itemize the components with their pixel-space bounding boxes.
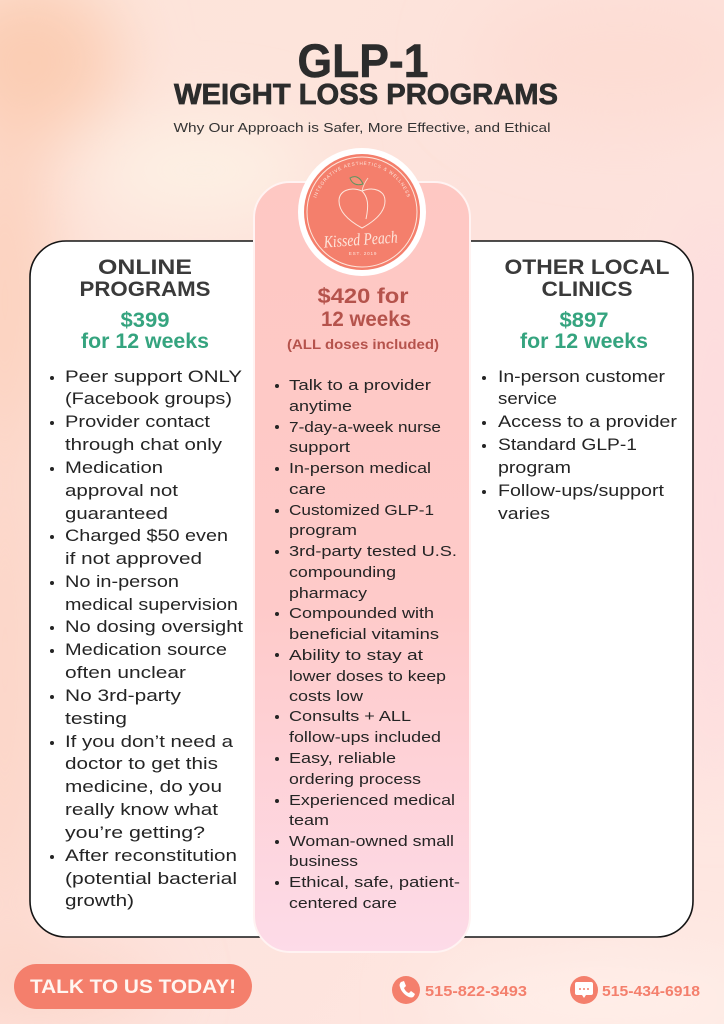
logo: kissed peach: INTEGRATIVE AESTHETICS & WELLNESS [313, 162, 410, 198]
logo: kissed peach: Kissed Peach [322, 227, 398, 252]
list: other local clinics: In-person customer [498, 368, 666, 386]
list: online programs: medicine, do you [65, 778, 222, 796]
icon: chat bubble [570, 976, 598, 1004]
price: kissed peach: (ALL doses included) [287, 336, 439, 352]
center column background [254, 182, 470, 952]
list: online programs: Peer support ONLY [65, 368, 242, 386]
list: kissed peach: follow-ups included [289, 729, 441, 746]
list: kissed peach: lower doses to keep [289, 668, 446, 685]
list: online programs: approval not [65, 482, 179, 500]
list: kissed peach: Ethical, safe, patient- [289, 874, 460, 891]
panel: kissed peach program [253, 148, 471, 953]
list: online programs: After reconstitution [65, 847, 237, 865]
list: kissed peach: support [289, 439, 351, 456]
list: kissed peach: team [289, 812, 329, 829]
list: online programs: Charged $50 even [65, 527, 228, 545]
list: kissed peach: Woman-owned small [289, 833, 454, 850]
list: other local clinics: Standard GLP-1 [498, 436, 637, 454]
price: other local clinics: $897 [560, 309, 608, 332]
list: kissed peach: anytime [289, 398, 352, 415]
list: other local clinics [482, 368, 678, 523]
list: other local clinics: program [498, 459, 571, 477]
list: online programs: If you don’t need a [65, 733, 234, 751]
list: other local clinics: Follow-ups/support [498, 482, 664, 500]
list: online programs: doctor to get this [65, 755, 218, 773]
heading: online programs [80, 256, 210, 301]
contact: phone: 515-822-3493 [425, 984, 527, 1000]
list: kissed peach: 3rd-party tested U.S. [289, 543, 457, 560]
list: kissed peach: 7-day-a-week nurse [289, 419, 441, 436]
list: online programs: (potential bacterial [65, 870, 237, 888]
list: online programs: Medication [65, 459, 163, 477]
panel: comparison card background [30, 241, 693, 937]
price: online programs [81, 309, 209, 353]
heading: other local clinics [504, 256, 670, 301]
price: other local clinics [520, 309, 648, 353]
list: online programs: growth) [65, 892, 134, 910]
list: online programs: (Facebook groups) [65, 390, 232, 408]
price: online programs: for 12 weeks [81, 330, 209, 353]
list: online programs: medical supervision [65, 596, 238, 614]
list: online programs: really know what [65, 801, 219, 819]
contact: text message: 515-434-6918 [602, 984, 700, 1000]
heading: other local clinics: OTHER LOCAL [504, 256, 670, 279]
heading: online programs: PROGRAMS [80, 278, 210, 301]
list: kissed peach: Ability to stay at [289, 647, 424, 664]
list: kissed peach: costs low [289, 688, 363, 705]
panel: online programs [50, 256, 243, 910]
icon: peach [339, 178, 385, 228]
list: online programs: testing [65, 710, 127, 728]
list: kissed peach: Talk to a provider [289, 377, 431, 394]
list: kissed peach: care [289, 481, 326, 498]
list: kissed peach: program [289, 522, 357, 539]
list: kissed peach: business [289, 853, 358, 870]
price: kissed peach [287, 285, 439, 352]
button: talk to us today [14, 964, 252, 1009]
list: kissed peach: Easy, reliable [289, 750, 396, 767]
heading: other local clinics: CLINICS [542, 278, 632, 301]
list: other local clinics: service [498, 390, 557, 408]
list: online programs: through chat only [65, 436, 223, 454]
list: kissed peach: beneficial vitamins [289, 626, 439, 643]
icon: phone [392, 976, 420, 1004]
title: WEIGHT LOSS PROGRAMS [174, 79, 558, 111]
list: online programs: Medication source [65, 641, 227, 659]
list: online programs: No 3rd-party [65, 687, 182, 705]
button: talk to us today: TALK TO US TODAY! [30, 977, 236, 998]
list: kissed peach: Customized GLP-1 [289, 502, 434, 519]
panel: other local clinics [482, 256, 678, 523]
title: GLP-1 [298, 34, 428, 87]
list: online programs [50, 368, 243, 910]
list: online programs: often unclear [65, 664, 187, 682]
list: kissed peach: Consults + ALL [289, 708, 411, 725]
price: kissed peach: 12 weeks [321, 308, 411, 331]
list: online programs: guaranteed [65, 505, 168, 523]
list: kissed peach: ordering process [289, 771, 421, 788]
heading: online programs: ONLINE [98, 256, 192, 279]
list: kissed peach: Experienced medical [289, 792, 455, 809]
icon: leaf [350, 177, 363, 185]
price: other local clinics: for 12 weeks [520, 330, 648, 353]
list: online programs: No in-person [65, 573, 179, 591]
contact: text message [570, 976, 700, 1004]
title [174, 34, 558, 111]
list: online programs: you’re getting? [65, 824, 205, 842]
list: kissed peach: Compounded with [289, 605, 434, 622]
list: other local clinics: varies [498, 505, 550, 523]
list: kissed peach: In-person medical [289, 460, 431, 477]
list: kissed peach [275, 377, 460, 912]
logo: kissed peach: EST. 2019 [349, 251, 377, 256]
price: online programs: $399 [120, 309, 170, 332]
contact: phone [392, 976, 527, 1004]
list: online programs: if not approved [65, 550, 202, 568]
list: online programs: Provider contact [65, 413, 210, 431]
list: other local clinics: Access to a provider [498, 413, 678, 431]
logo: kissed peach [298, 148, 426, 276]
list: kissed peach: centered care [289, 895, 397, 912]
list: kissed peach: pharmacy [289, 585, 368, 602]
subtitle: Why Our Approach is Safer, More Effective, and Ethical [174, 120, 551, 135]
list: kissed peach: compounding [289, 564, 396, 581]
list: online programs: No dosing oversight [65, 618, 243, 636]
price: kissed peach: $420 for [318, 285, 408, 308]
